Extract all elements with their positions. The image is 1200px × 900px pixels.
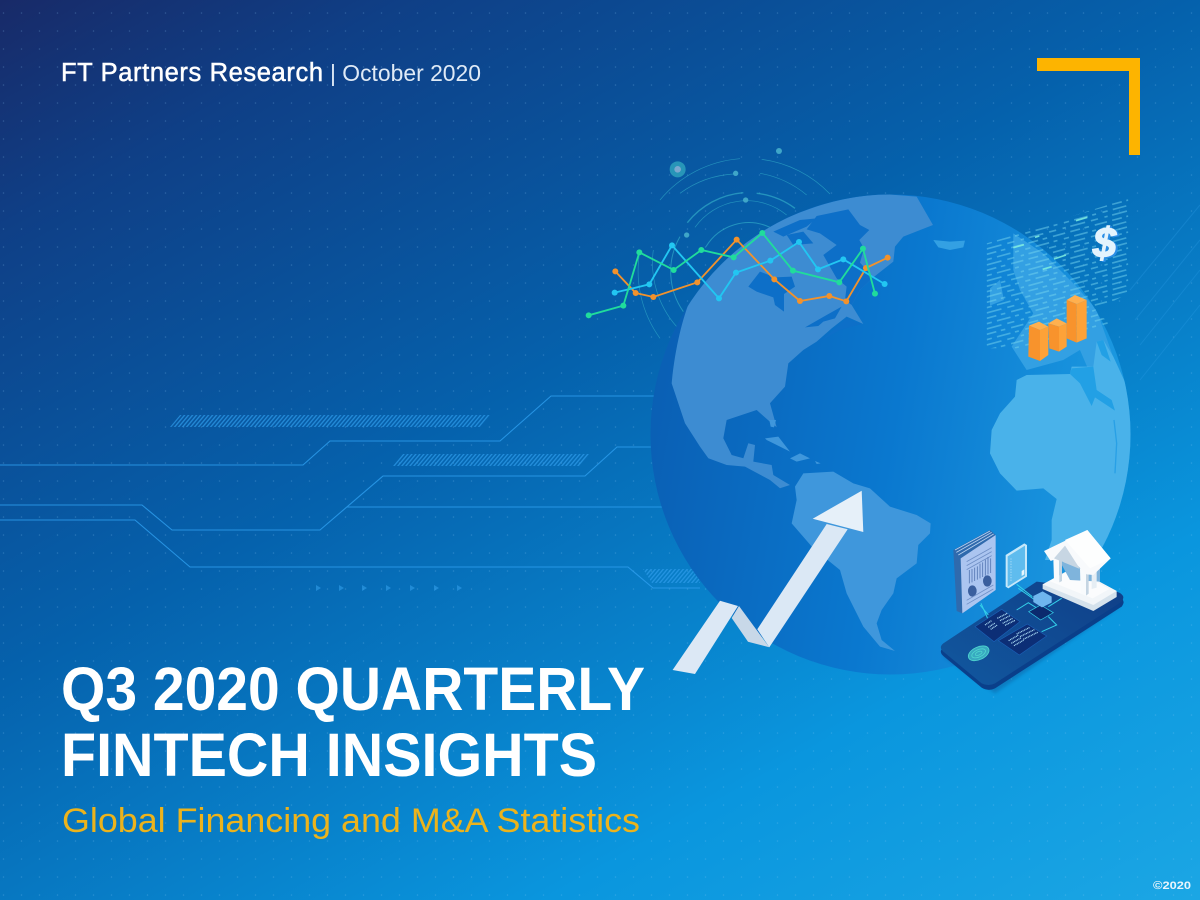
document — [953, 530, 996, 615]
credit card — [1006, 543, 1032, 597]
fintech phone illustration — [941, 582, 1124, 693]
dollar icon: $ — [1092, 219, 1117, 266]
gold corner bracket — [1037, 58, 1140, 155]
circuit lines — [0, 396, 700, 588]
orange series — [612, 237, 891, 304]
3D orange bar chart — [1028, 295, 1087, 361]
chip — [1029, 591, 1053, 620]
header text — [61, 59, 481, 87]
south america and caribbean — [765, 420, 931, 651]
fingerprint — [966, 643, 991, 664]
circuit traces — [981, 588, 1062, 632]
glowing nodes — [670, 148, 782, 238]
data readout dashes — [987, 200, 1128, 361]
hatched bars — [170, 415, 700, 583]
africa, arabia and eastern rim — [990, 340, 1133, 560]
europe and islands — [934, 234, 1112, 370]
header text: FT Partners Research — [61, 59, 323, 87]
continents — [672, 194, 1133, 651]
phone — [941, 582, 1124, 690]
line chart — [586, 230, 891, 318]
diagonal light streaks — [1130, 205, 1200, 380]
cyan series — [612, 239, 888, 301]
small arrow markers — [316, 585, 462, 591]
growth arrow — [673, 491, 863, 674]
copyright: ©2020 — [1153, 880, 1191, 892]
main title: Q3 2020 QUARTERLY — [61, 655, 645, 723]
dollar icon: $ — [1094, 220, 1119, 267]
north america and greenland — [672, 194, 933, 488]
globe — [650, 194, 1133, 674]
header text: | October 2020 — [330, 60, 481, 86]
bright data dashes — [1013, 217, 1087, 269]
green series — [586, 230, 878, 318]
subtitle: Global Financing and M&A Statistics — [62, 802, 640, 840]
main title: FINTECH INSIGHTS — [61, 721, 597, 789]
radar arcs — [638, 159, 830, 338]
bank building — [1043, 530, 1117, 611]
data tiles — [975, 609, 1047, 655]
main title — [61, 655, 645, 789]
phone shadow — [943, 593, 1120, 693]
